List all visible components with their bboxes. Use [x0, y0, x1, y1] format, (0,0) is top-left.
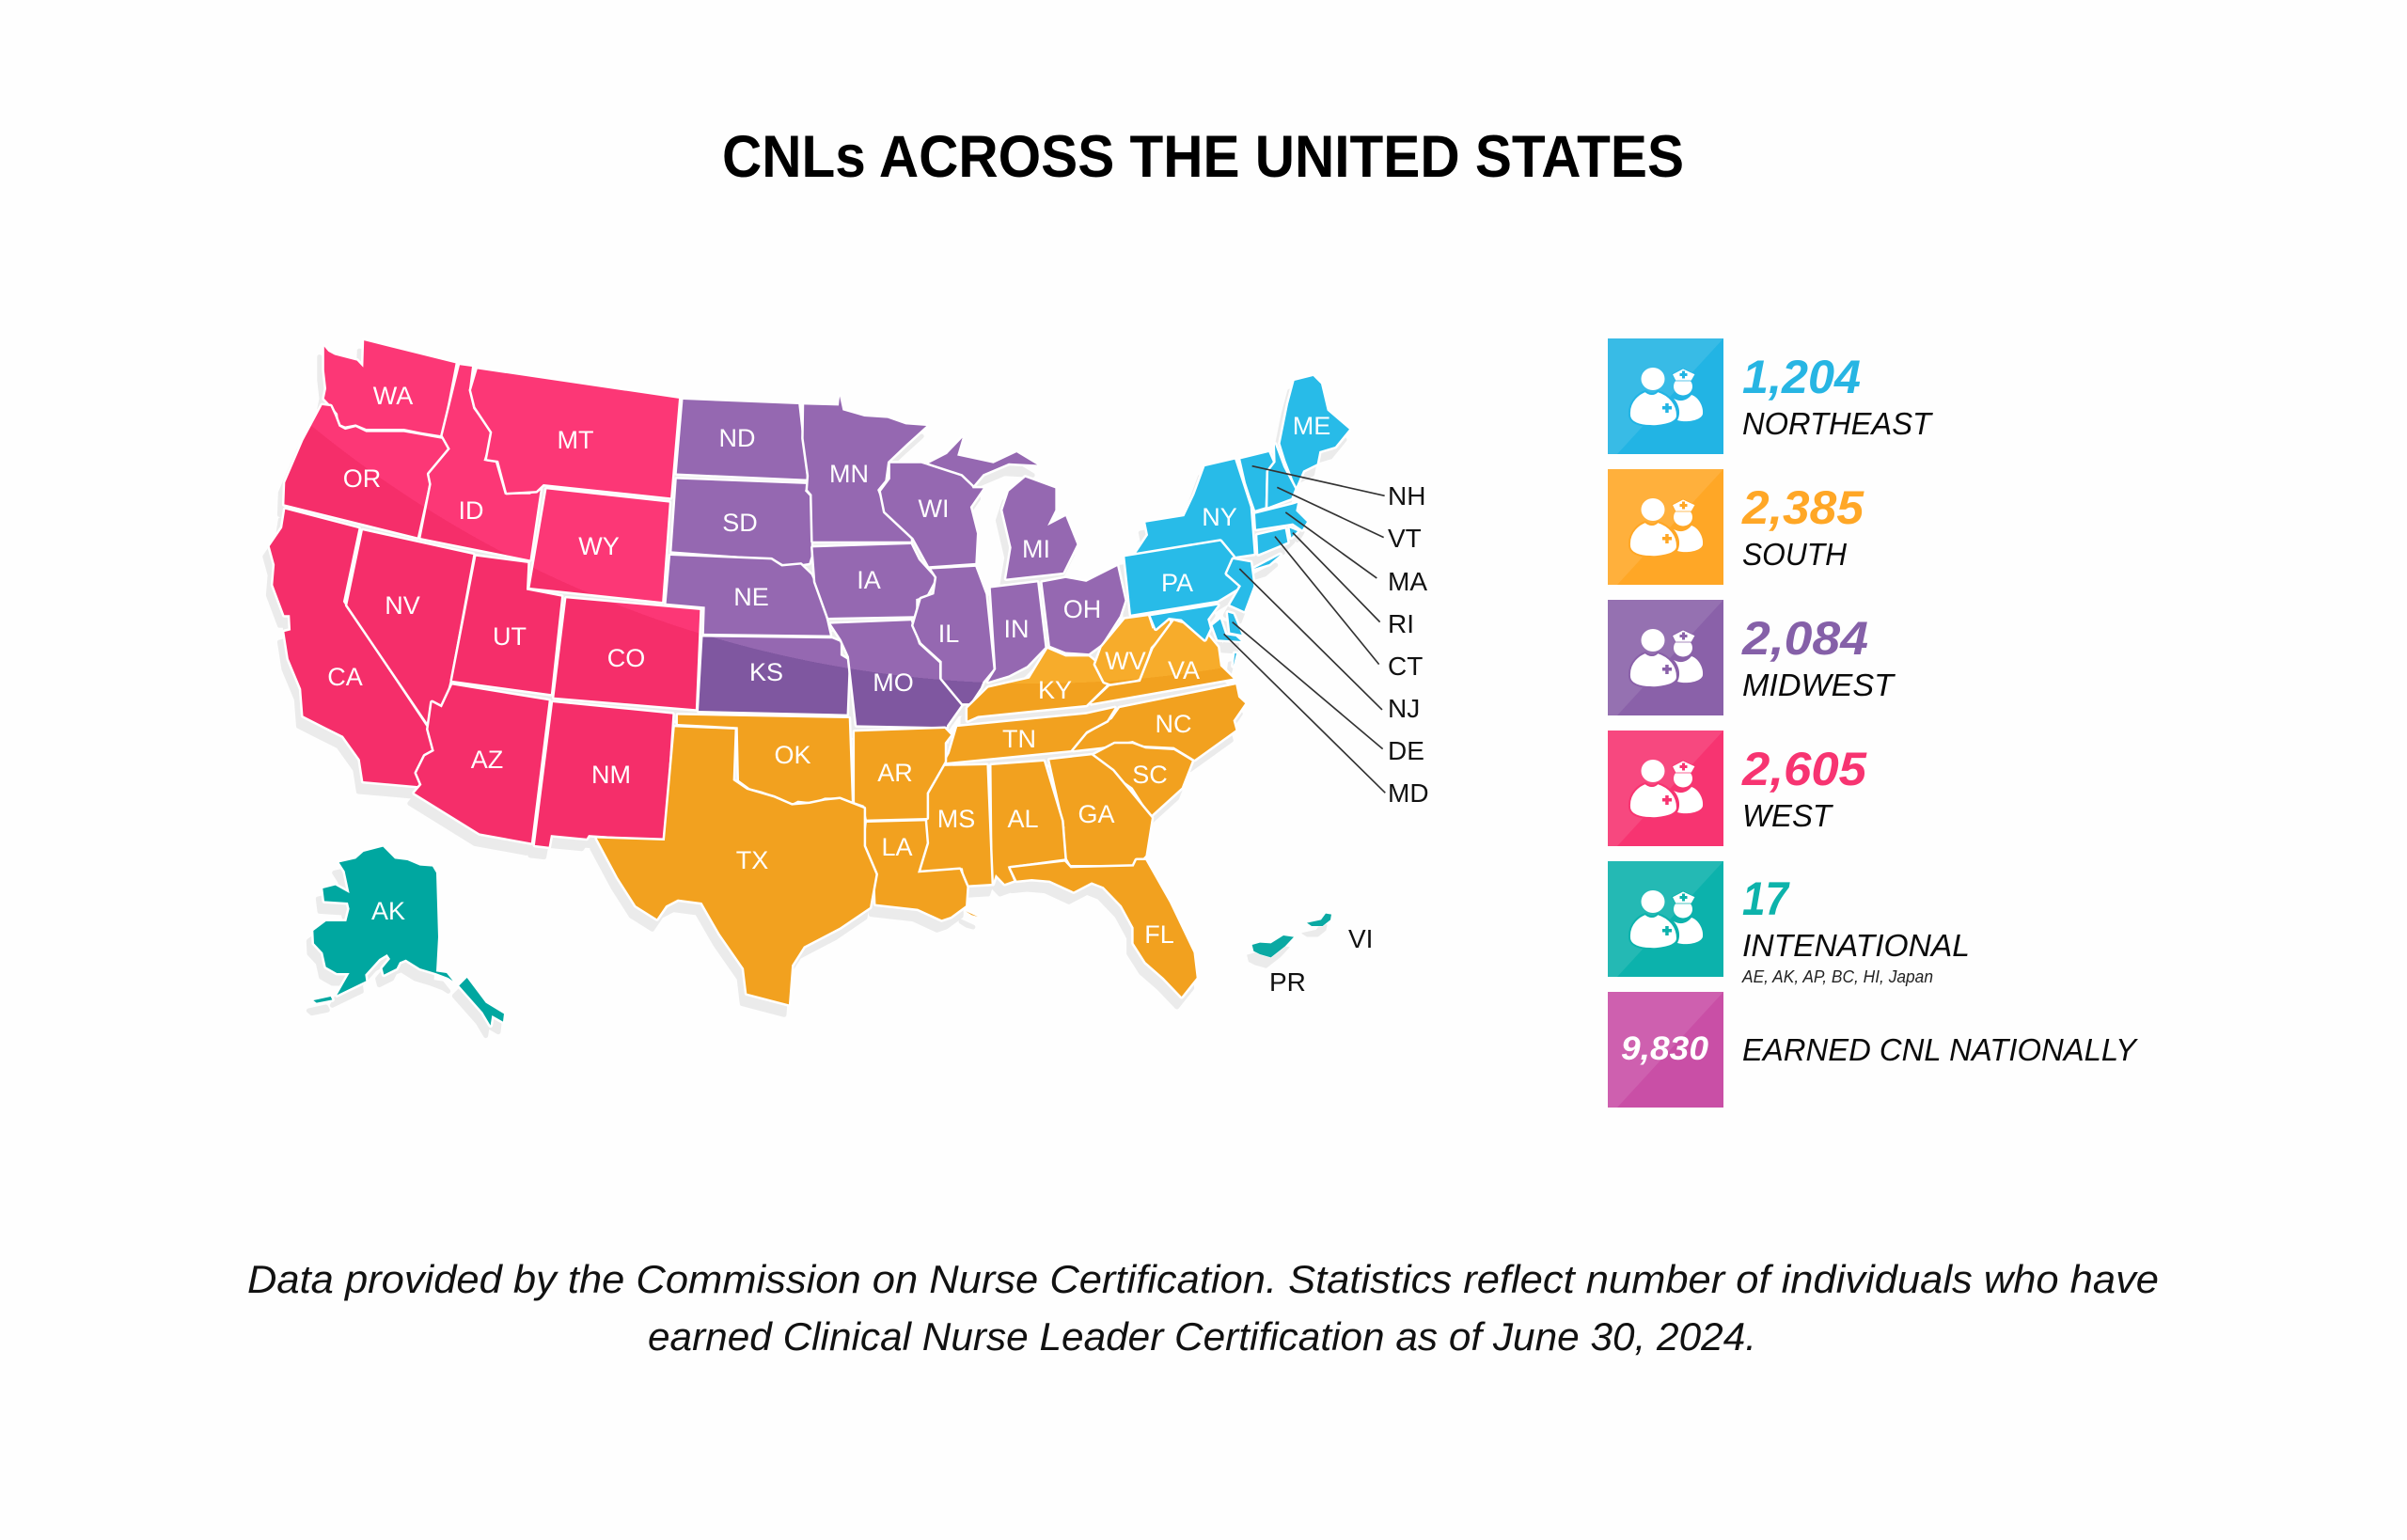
state: ID: ID	[459, 496, 483, 525]
callout labels: northeast states: MA	[1388, 567, 1427, 596]
state: AL: AL	[1007, 805, 1039, 833]
state: WV: WV	[1105, 647, 1146, 675]
state: ND	[677, 400, 807, 479]
state: AK	[313, 847, 504, 1026]
state: CA	[270, 510, 434, 786]
state: IA: IA	[857, 566, 881, 594]
state: AR: AR	[877, 759, 913, 787]
legend card: northeast	[1608, 338, 1934, 454]
state: PA	[1125, 542, 1241, 615]
state: IA	[813, 544, 936, 618]
label: NORTHEAST: NORTHEAST	[1742, 406, 1934, 441]
state: TX: TX	[736, 846, 768, 874]
state: VA eastern shore	[1234, 653, 1236, 666]
state: LA	[864, 821, 978, 919]
icon: nurses	[1629, 760, 1703, 818]
state: TN	[944, 708, 1114, 762]
territory: PR shape	[1252, 935, 1294, 957]
map: United States by region	[270, 340, 1349, 1026]
state: IN	[988, 582, 1045, 682]
legend card: south	[1608, 469, 1864, 585]
state: IL: IL	[938, 620, 959, 648]
state: MT	[471, 369, 679, 497]
state: MS: MS	[937, 805, 975, 833]
state: WY	[530, 489, 669, 602]
state: WY: WY	[578, 532, 620, 560]
state: VA: VA	[1168, 656, 1200, 684]
state: SD	[671, 479, 811, 565]
territory: VI shape	[1307, 914, 1331, 926]
legend card: midwest	[1608, 600, 1896, 715]
label: INTENATIONAL: INTENATIONAL	[1742, 928, 1970, 963]
state: TN: TN	[1002, 725, 1036, 753]
state: KS	[699, 636, 849, 715]
callout labels: northeast states: NJ	[1388, 694, 1420, 723]
state: KS: KS	[749, 658, 783, 686]
state: NM	[535, 702, 672, 847]
state: MS	[920, 765, 992, 886]
stat: 17: 17	[1742, 872, 1790, 925]
state: GA: GA	[1078, 800, 1115, 828]
state: CO: CO	[607, 644, 645, 672]
stat: 1,204: 1,204	[1742, 351, 1861, 403]
state: CO	[554, 598, 700, 709]
label: MIDWEST: MIDWEST	[1742, 668, 1896, 702]
callout labels: northeast states: CT	[1388, 652, 1423, 681]
callout labels: northeast states: NH	[1388, 481, 1425, 511]
state: KY: KY	[1038, 676, 1072, 704]
note: international locations: AE, AK, AP, BC, HI, Japan	[1741, 967, 1933, 986]
state: TX	[597, 727, 875, 1004]
callout labels: northeast states: MD	[1388, 778, 1429, 808]
stat: 2,385: 2,385	[1741, 481, 1864, 534]
state: ME: ME	[1293, 412, 1330, 440]
state: AZ	[415, 685, 549, 842]
state: NC	[1074, 684, 1245, 760]
state: MO	[831, 621, 963, 736]
icon: nurses	[1629, 498, 1703, 557]
state: ND: ND	[718, 424, 756, 452]
state: MD	[1151, 605, 1241, 641]
state: GA	[1049, 755, 1152, 865]
label: VI: VI	[1348, 924, 1373, 953]
label: EARNED CNL NATIONALLY: EARNED CNL NATIONALLY	[1742, 1032, 2138, 1067]
state: NY	[1135, 460, 1254, 557]
label: PR: PR	[1269, 967, 1306, 997]
state: MI	[929, 438, 1077, 579]
label: SOUTH: SOUTH	[1742, 537, 1847, 572]
legend card: national total	[1608, 992, 2138, 1108]
state: LA: LA	[881, 833, 913, 861]
stat: 2,084: 2,084	[1741, 612, 1868, 665]
state: NH	[1267, 445, 1295, 507]
state: OR: OR	[343, 464, 381, 493]
state: PA: PA	[1161, 569, 1193, 597]
footer note: earned Clinical Nurse Leader Certification as of June 30, 2024.	[648, 1314, 1756, 1359]
state: NV	[347, 530, 473, 723]
state: VA	[1092, 621, 1234, 703]
state: WA: WA	[373, 382, 413, 410]
state: OK: OK	[774, 741, 811, 769]
state: CT	[1257, 529, 1287, 554]
state: AK: AK	[371, 897, 405, 925]
state: AR	[855, 729, 951, 820]
state: ID	[420, 365, 541, 559]
state: AZ: AZ	[471, 746, 503, 774]
legend card: international	[1608, 861, 1970, 986]
callout labels: northeast states: DE	[1388, 736, 1424, 765]
state: DE	[1228, 613, 1242, 635]
icon: nurses	[1629, 629, 1703, 687]
state: IL	[914, 567, 994, 703]
state: OH: OH	[1063, 595, 1101, 623]
state: KY	[968, 649, 1107, 720]
state: SD: SD	[722, 509, 758, 537]
state: MT: MT	[558, 426, 593, 454]
state: WI: WI	[918, 495, 950, 523]
state: CA: CA	[327, 663, 363, 691]
state: AL	[992, 762, 1064, 884]
state: UT: UT	[493, 622, 527, 651]
state: WV	[1095, 616, 1172, 686]
stat: 2,605: 2,605	[1741, 743, 1867, 795]
state: NJ	[1227, 559, 1253, 611]
title: CNLs ACROSS THE UNITED STATES	[722, 124, 1684, 190]
callout labels: northeast states	[1388, 481, 1429, 808]
state: UT	[452, 557, 561, 694]
state: NV: NV	[385, 591, 420, 620]
state: MN	[804, 396, 926, 542]
state: FL	[1011, 860, 1197, 997]
state: VT	[1240, 452, 1273, 511]
state: MN: MN	[829, 460, 869, 488]
state: ME	[1281, 376, 1349, 487]
state: NE	[667, 556, 830, 636]
state: RI	[1290, 528, 1298, 538]
state: WA	[324, 340, 456, 435]
state: NE: NE	[733, 583, 769, 611]
legend card: west	[1608, 731, 1867, 846]
island: Long Island	[1253, 555, 1281, 569]
icon: nurses	[1629, 890, 1703, 949]
state: WI	[881, 464, 983, 566]
state: IN: IN	[1004, 615, 1029, 643]
state: SC	[1093, 744, 1192, 816]
state: OH	[1043, 566, 1125, 653]
icon: nurses	[1629, 368, 1703, 426]
callout lines: northeast states	[1224, 466, 1385, 793]
state: SC: SC	[1132, 761, 1168, 789]
footer note: Data provided by the Commission on Nurse Certification. Statistics reflect number of individuals who have	[247, 1257, 2159, 1301]
stat: 9,830: 9,830	[1621, 1030, 1709, 1067]
state: FL: FL	[1144, 920, 1174, 949]
state: MA	[1255, 503, 1307, 529]
state: MO: MO	[873, 668, 914, 697]
callout labels: northeast states: RI	[1388, 609, 1414, 638]
state: OK	[678, 715, 852, 804]
callout labels: northeast states: VT	[1388, 524, 1422, 553]
state: OR	[284, 405, 449, 537]
state: NY: NY	[1202, 503, 1237, 531]
state: NC: NC	[1155, 710, 1192, 738]
state: NM: NM	[591, 761, 631, 789]
state: MI: MI	[1022, 535, 1050, 563]
label: WEST: WEST	[1742, 798, 1834, 833]
footer note	[247, 1257, 2159, 1359]
